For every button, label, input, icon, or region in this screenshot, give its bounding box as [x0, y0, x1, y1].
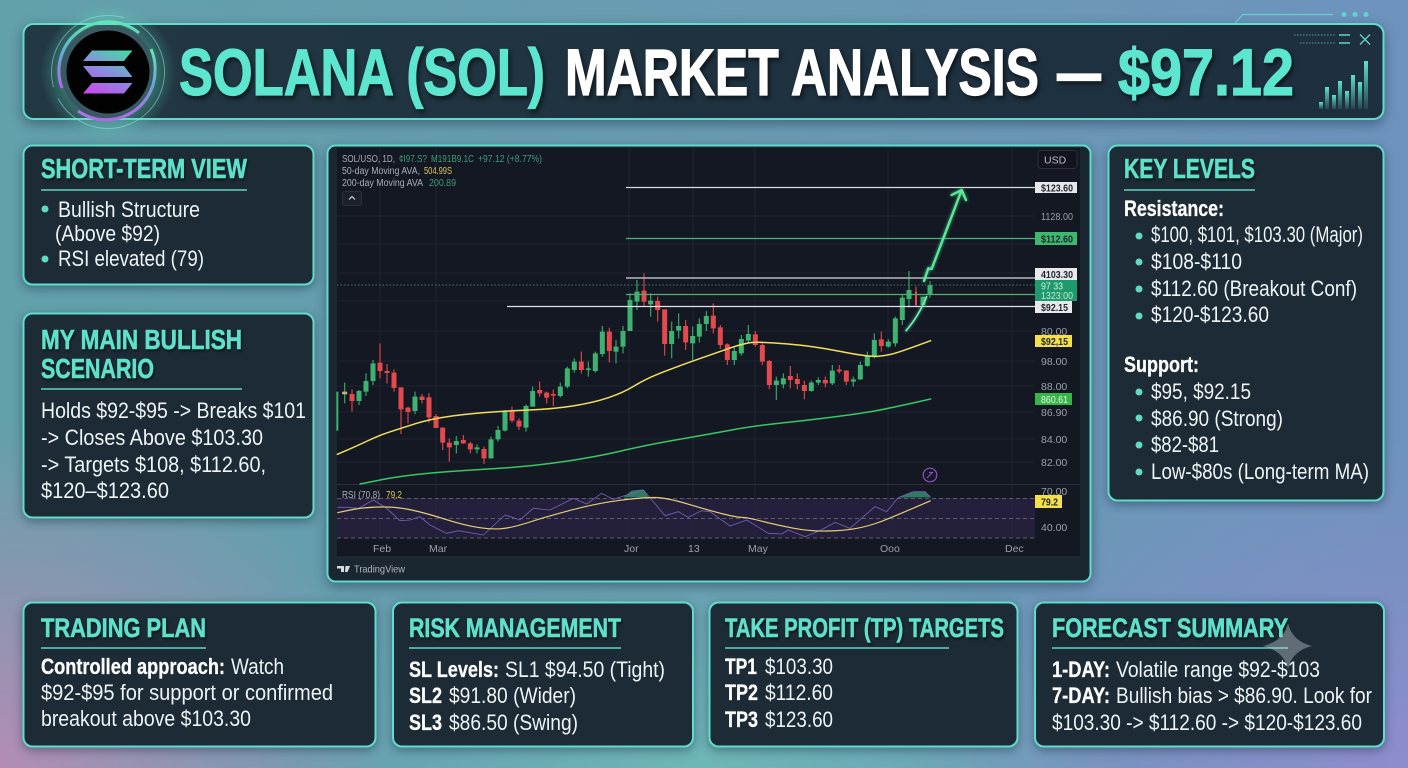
price tags: 97 33	[1041, 282, 1063, 292]
tradingview branding	[337, 564, 405, 576]
collapse button	[342, 192, 362, 206]
targets: TP3	[725, 707, 758, 732]
panel: main bullish scenario	[24, 314, 314, 518]
top right decoration	[1235, 12, 1368, 23]
scenario text	[41, 398, 306, 503]
chart legend: +97.12 (+8.77%)	[478, 154, 542, 165]
plan text: breakout above $103.30	[41, 706, 251, 731]
chart legend: SOL/USO, 1D,	[342, 154, 395, 165]
panel: take profit targets	[710, 602, 1018, 746]
chart legend: ¢I97.S?	[399, 154, 427, 165]
support list: Support:	[1124, 352, 1199, 377]
USD selector: USD	[1044, 154, 1067, 166]
icon: solana logo	[40, 4, 176, 140]
rsi pane: 79.2	[386, 490, 402, 501]
title text: —	[1057, 35, 1101, 109]
resistance list: $108-$110	[1151, 249, 1242, 274]
price tags: $123.60	[1041, 182, 1073, 194]
resistance list: $120-$123.60	[1151, 302, 1269, 327]
stop loss levels: SL Levels:	[409, 657, 499, 682]
price axis labels: 80.00	[1041, 326, 1067, 338]
stop loss levels: SL1 $94.50 (Tight)	[505, 657, 665, 682]
forecast text: $103.30 -> $112.60 -> $120-$123.60	[1052, 710, 1362, 735]
chart legend	[342, 154, 542, 189]
price tags: $112.60	[1041, 234, 1073, 246]
scenario text: Holds $92-$95 -> Breaks $101	[41, 398, 306, 423]
support list	[1124, 352, 1369, 484]
resistance list: Resistance:	[1124, 196, 1224, 221]
rsi pane: RSI (70,8)	[342, 490, 380, 501]
title text: SOLANA (SOL)	[179, 35, 545, 109]
time axis labels: May	[748, 543, 769, 555]
icon: event marker	[923, 468, 937, 482]
forecast text	[1052, 657, 1372, 735]
price axis labels: 1128.00	[1041, 211, 1073, 223]
targets: $112.60	[765, 680, 833, 705]
heading: TAKE PROFIT (TP) TARGETS	[725, 613, 1004, 643]
time axis labels: Mar	[429, 543, 448, 555]
support list: $86.90 (Strong)	[1151, 406, 1283, 431]
price tags: $92,15	[1041, 336, 1068, 348]
targets: TP2	[725, 680, 758, 705]
panel: price chart	[328, 146, 1090, 582]
price tags: 860.61	[1041, 394, 1068, 406]
title text: $97.12	[1118, 35, 1294, 109]
heading: MY MAIN BULLISH	[41, 324, 242, 355]
plan text: Watch	[231, 654, 284, 679]
time axis labels: Jor	[624, 543, 639, 555]
plan text: $92-$95 for support or confirmed	[41, 680, 333, 705]
arrow: bullish projection	[906, 190, 966, 331]
support list: $95, $92.15	[1151, 379, 1251, 404]
rsi pane	[337, 489, 1035, 538]
chart legend: 200-day Moving AVA	[342, 178, 423, 189]
heading: RISK MANAGEMENT	[409, 613, 621, 643]
heading: KEY LEVELS	[1124, 153, 1255, 184]
price axis labels: 40.00	[1041, 522, 1067, 534]
candlesticks	[337, 271, 930, 464]
bullet list: Bullish Structure	[58, 197, 200, 222]
price axis labels: 82.00	[1041, 457, 1067, 469]
chart legend: 504.99S	[424, 166, 452, 177]
icon: mini bar chart	[1319, 61, 1368, 109]
stop loss levels: $91.80 (Wider)	[449, 683, 576, 708]
title text: MARKET ANALYSIS	[565, 35, 1039, 109]
icon: sparkle	[1263, 623, 1312, 669]
stop loss levels	[409, 657, 665, 735]
price axis labels: 84.00	[1041, 434, 1067, 446]
price level lines	[337, 188, 1035, 306]
targets: $103.30	[765, 654, 833, 679]
targets	[725, 654, 833, 732]
price tags: 1323:00	[1041, 291, 1073, 302]
resistance list: $112.60 (Breakout Conf)	[1151, 276, 1357, 301]
forecast text: 1-DAY:	[1052, 657, 1110, 682]
bullet list: RSI elevated (79)	[58, 246, 204, 271]
price axis labels	[1041, 211, 1073, 534]
scenario text: -> Closes Above $103.30	[41, 425, 263, 450]
chart legend: 50-day Moving AVA,	[342, 166, 420, 177]
forecast text: 7-DAY:	[1052, 683, 1110, 708]
USD selector	[1038, 150, 1077, 168]
resistance list	[1124, 196, 1363, 327]
time axis labels: Feb	[373, 543, 391, 555]
price axis labels: 98.00	[1041, 356, 1067, 368]
scenario text: -> Targets $108, $112.60,	[41, 452, 266, 477]
panel: forecast summary	[1035, 602, 1384, 746]
price axis labels: 70.00	[1041, 486, 1067, 498]
heading: FORECAST SUMMARY	[1052, 613, 1288, 643]
tradingview branding: TradingView	[354, 564, 405, 576]
targets: TP1	[725, 654, 757, 679]
panel: trading plan	[24, 602, 376, 746]
price axis labels: 88.00	[1041, 381, 1067, 393]
stop loss levels: SL2	[409, 683, 442, 708]
bullet list	[42, 197, 204, 271]
time axis labels: Dec	[1005, 543, 1024, 555]
time axis labels: Ooo	[880, 543, 900, 555]
scenario text: $120–$123.60	[41, 478, 169, 503]
plan text: Controlled approach:	[41, 654, 225, 679]
price tags: 4103.30	[1041, 269, 1073, 281]
title banner	[24, 4, 1384, 140]
price axis labels: 86.90	[1041, 407, 1067, 419]
support list: Low-$80s (Long-term MA)	[1151, 459, 1369, 484]
panel: risk management	[393, 602, 693, 746]
heading: SCENARIO	[41, 353, 154, 384]
forecast text: Volatile range $92-$103	[1116, 657, 1320, 682]
moving average lines	[337, 341, 931, 484]
price tags: $92.15	[1041, 302, 1068, 314]
price tags: 79.2	[1041, 496, 1058, 508]
icon: window controls	[1294, 34, 1370, 44]
price tags	[1035, 182, 1077, 508]
targets: $123.60	[765, 707, 833, 732]
bullet list: (Above $92)	[55, 221, 160, 246]
support list: $82-$81	[1151, 432, 1219, 457]
chart legend: 200.89	[429, 178, 456, 189]
stop loss levels: $86.50 (Swing)	[449, 710, 578, 735]
time axis labels: 13	[688, 543, 700, 555]
heading: SHORT-TERM VIEW	[41, 153, 247, 184]
stop loss levels: SL3	[409, 710, 442, 735]
title text	[179, 35, 1294, 109]
heading: TRADING PLAN	[41, 613, 206, 643]
chart legend: M191B9.1C	[431, 154, 474, 165]
panel: key levels	[1108, 146, 1384, 500]
plan text	[41, 654, 333, 731]
chart grid	[337, 148, 1035, 538]
panel: short-term view	[24, 146, 314, 284]
heading	[41, 324, 242, 384]
banner background	[24, 24, 1384, 119]
time axis labels	[373, 543, 1024, 555]
